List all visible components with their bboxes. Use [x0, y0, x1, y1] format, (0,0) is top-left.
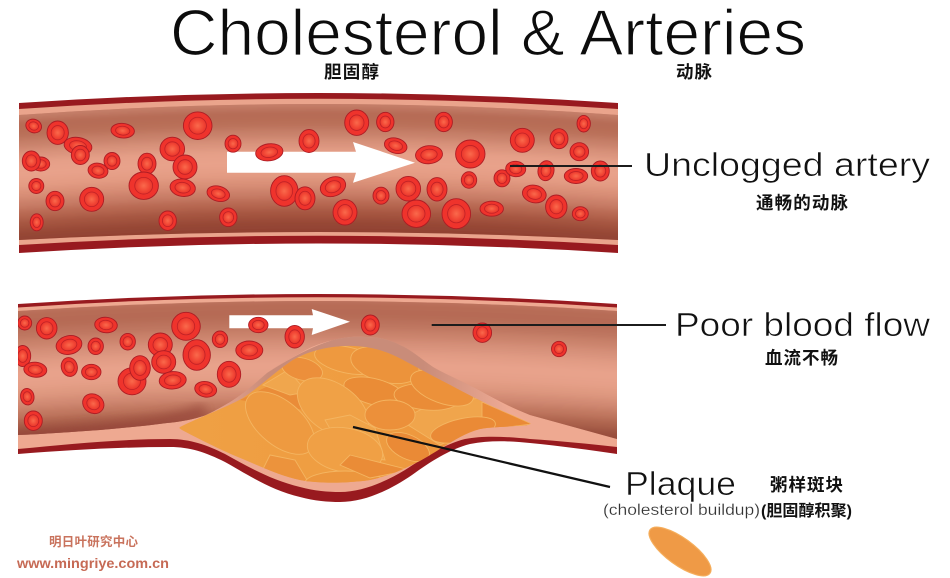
label: unclogged artery: Unclogged artery — [644, 146, 931, 183]
watermark: centre name: 明日叶研究中心 — [49, 534, 138, 549]
artery wall: dark outer — [19, 93, 618, 253]
artery lumen — [19, 104, 618, 240]
leader line: plaque — [353, 427, 610, 487]
label: poor blood flow: Poor blood flow — [675, 306, 930, 343]
label: cholesterol buildup: (cholesterol buildup) — [603, 502, 760, 519]
arrow: reduced blood flow — [229, 309, 350, 335]
artery lumen — [18, 301, 617, 439]
artery wall: dark outer — [18, 294, 617, 502]
label translation: unclogged artery: 通畅的动脉 — [756, 193, 848, 213]
leader line: unclogged artery — [510, 165, 632, 167]
label translation: plaque: 粥样斑块 — [770, 475, 843, 495]
leader line: poor blood flow — [432, 324, 666, 326]
artery wall: light inner band — [19, 99, 618, 245]
plaque wall over deposit — [180, 337, 530, 427]
red blood cells — [15, 312, 566, 430]
arrow: fast blood flow — [227, 142, 415, 183]
title translation: cholesterol: 胆固醇 — [324, 62, 379, 82]
title translation: arteries: 动脉 — [676, 62, 712, 82]
label translation: poor blood flow: 血流不畅 — [765, 348, 838, 368]
red blood cells — [22, 110, 609, 231]
plaque deposit — [180, 346, 530, 483]
label translation: cholesterol buildup: (胆固醇积聚) — [761, 501, 852, 520]
panel: clogged artery — [18, 294, 617, 502]
label: plaque: Plaque — [625, 465, 736, 502]
watermark: website: www.mingriye.com.cn — [16, 556, 169, 571]
panel: unclogged artery — [19, 93, 618, 253]
icon: plaque cell — [642, 519, 718, 578]
artery wall: light inner band — [18, 297, 617, 492]
